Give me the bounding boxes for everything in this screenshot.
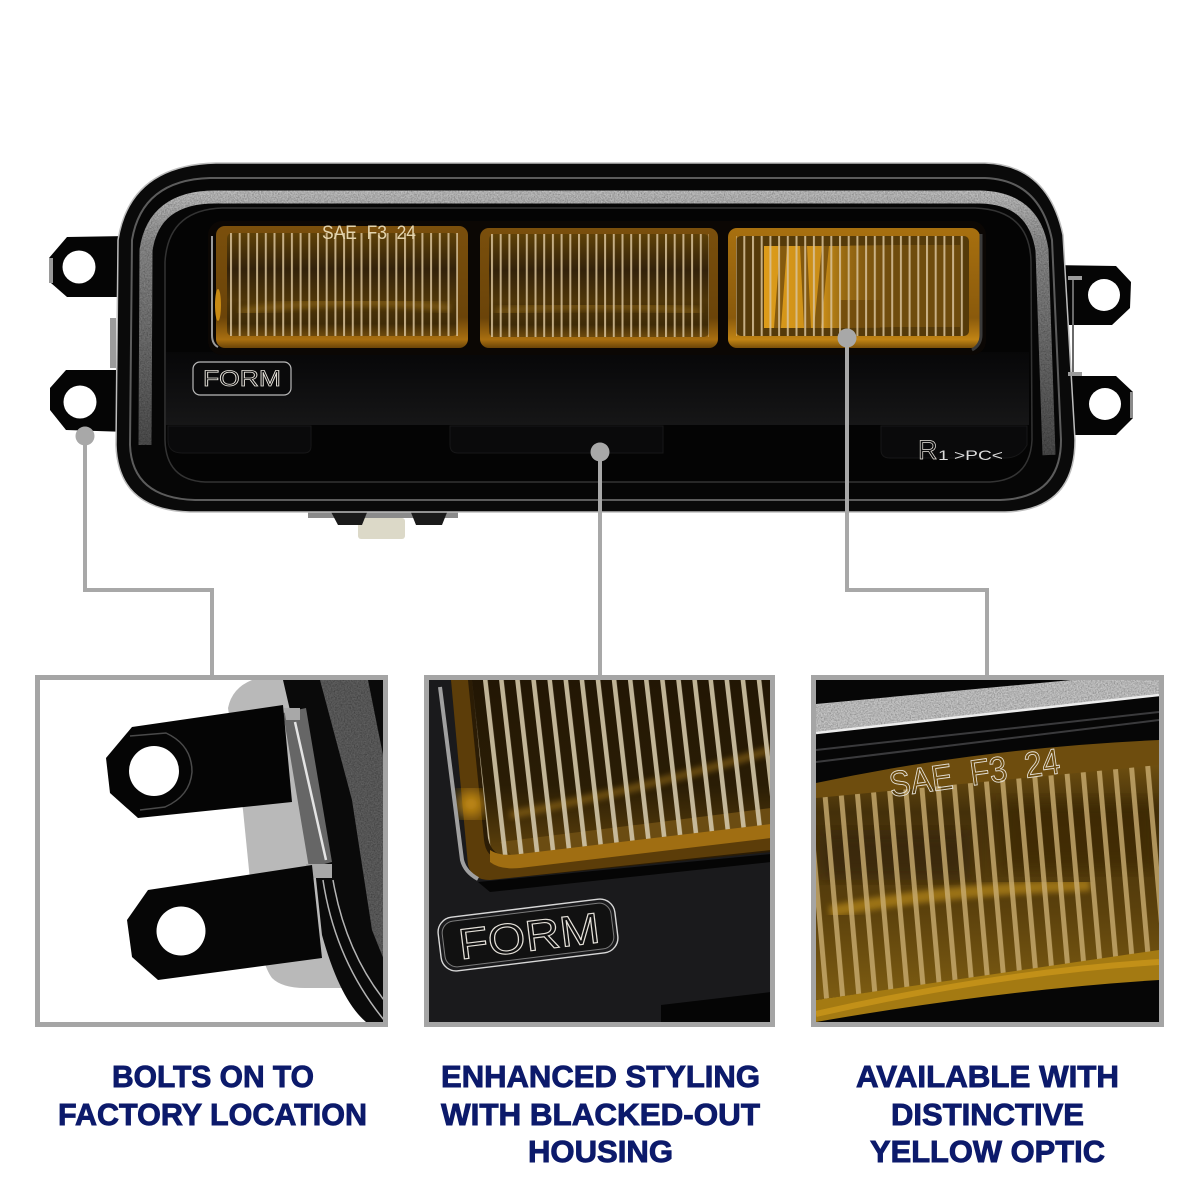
- lens: right optic: [728, 228, 981, 350]
- caption: yellow optic: AVAILABLE WITH: [856, 1059, 1119, 1094]
- outer clear housing: [116, 163, 1075, 512]
- caption: styling: ENHANCED STYLING: [441, 1059, 760, 1094]
- grey rear housing: [228, 680, 350, 988]
- lens: centre optic: [480, 228, 718, 348]
- silver textured band: [816, 680, 1159, 733]
- caption: styling: HOUSING: [528, 1134, 673, 1169]
- panel: blacked-out housing close-up: [426, 660, 789, 1024]
- clear clip strips: [110, 276, 1082, 376]
- FORM badge: FORM: [456, 904, 603, 969]
- clear clip strip: [283, 708, 332, 868]
- lens ribs: [473, 680, 770, 855]
- callout leader: bolts on: [76, 426, 212, 676]
- inner rim highlight: [130, 178, 1061, 500]
- etched: R1 PC marking: [918, 435, 1003, 465]
- etched: FORM badge: [193, 362, 291, 395]
- lower tab: [127, 865, 322, 980]
- callout leader: yellow optic: [838, 328, 987, 676]
- lens core: [472, 680, 771, 856]
- FORM badge: [436, 897, 620, 973]
- lower recess tabs: [168, 426, 1027, 458]
- lens amber rim: [451, 680, 771, 880]
- etched: R1 PC marking: R: [918, 435, 938, 465]
- callout leader: styling: [590, 442, 610, 676]
- mounting tabs: [49, 236, 1133, 435]
- lens ribs: [816, 766, 1159, 999]
- lens recess: [208, 221, 986, 355]
- bright lower glow: [500, 808, 771, 856]
- product photo: fog light assembly: [49, 163, 1133, 539]
- caption: yellow optic: [856, 1059, 1119, 1169]
- etched: SAE F3 24: SAE F3 24: [886, 740, 1062, 805]
- panel: mounting tabs close-up: [38, 678, 386, 1024]
- dark ledge lines: [816, 712, 1159, 762]
- caption: bolts on: FACTORY LOCATION: [58, 1097, 367, 1132]
- bottom amber band: [816, 950, 1159, 1022]
- top amber rim: [816, 740, 1159, 799]
- black inner housing: [165, 208, 1032, 482]
- amber highlight band: [490, 824, 771, 868]
- etched: FORM badge: FORM: [203, 366, 281, 391]
- caption: yellow optic: YELLOW OPTIC: [870, 1134, 1105, 1169]
- curved clear edge: [323, 880, 384, 1020]
- etched: R1 PC marking: 1 >PC<: [938, 447, 1003, 463]
- dark lamp edge: [283, 680, 384, 1022]
- caption: styling: [441, 1059, 760, 1169]
- black gap under lens: [478, 854, 771, 892]
- textured lens frame: [320, 680, 384, 960]
- caption: bolts on: BOLTS ON TO: [112, 1059, 314, 1094]
- upper tab: [106, 705, 292, 818]
- lens: left optic: [212, 226, 468, 348]
- silver trim: [440, 687, 478, 879]
- panel frame: [38, 678, 386, 1024]
- textured silver band: [145, 197, 1049, 455]
- blacked-out lower panel: [166, 352, 1029, 425]
- rear connector: [308, 506, 458, 539]
- etched: SAE F3 24: SAE F3 24: [322, 223, 416, 244]
- caption: yellow optic: DISTINCTIVE: [891, 1097, 1084, 1132]
- caption: bolts on: [58, 1059, 367, 1132]
- panel frame: [814, 678, 1162, 1024]
- panel frame: [426, 678, 772, 1024]
- panel: yellow optic close-up: [800, 678, 1170, 1024]
- lens body: [816, 765, 1159, 1000]
- caption: styling: WITH BLACKED-OUT: [441, 1097, 760, 1132]
